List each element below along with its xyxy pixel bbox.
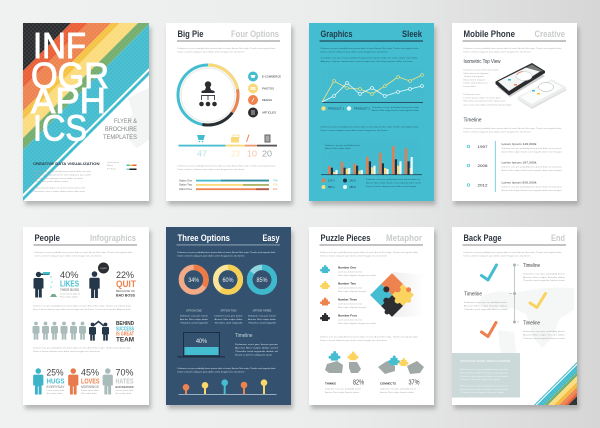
map texture <box>127 88 149 148</box>
intro text: Diam a lorem aliquam quis dolor amet feugiat nec dui lorem <box>464 254 531 258</box>
intro text: Diam a lorem aliquam quis dolor amet feugiat nec dui lorem <box>320 254 387 258</box>
subheading: Four Options <box>231 29 279 39</box>
timeline: Lorem Ipsum 119,000k <box>502 143 538 146</box>
cover legend <box>107 162 136 170</box>
timeline: Auctor Nisi vulpe thanks and regards dolor amet feugiat <box>502 169 562 172</box>
timeline entry 3: Dolorem cras pec probably lorem <box>523 331 565 333</box>
timeline entry 1: Timeline <box>523 263 540 269</box>
intro text: Dolorem cras pec probably lorem ipsum dolor sit amet, Auctor Nisi vulpe. Thanks and regards dolor <box>178 251 276 254</box>
rainbow stripes <box>23 23 149 201</box>
bar chart legend: 240 G <box>350 180 356 182</box>
intro text: Aliquam a lorem consectetur amet feugiat nec dui lorem ipsum dolor sit amet <box>320 60 413 63</box>
heading: Back Page <box>464 233 502 243</box>
numbered pieces <box>320 265 376 325</box>
stat icons <box>197 134 270 142</box>
stat: quit: BECAUSE OF <box>116 289 135 293</box>
subheading: Easy <box>262 233 280 243</box>
stat: likes: LIKES <box>60 280 80 288</box>
cover title: ICS <box>33 108 87 148</box>
donut: 85%: 85% <box>256 277 268 284</box>
stat: quit: 22% <box>116 270 135 281</box>
cover legend: Lorem ipsum <box>107 162 119 164</box>
timeline: 2008 <box>478 163 488 168</box>
numbered pieces: Lorem ipsum dolor sit amet <box>338 302 362 306</box>
intro text: Diam a lorem aliquam quis dolor amet feugiat nec dui lorem <box>464 50 531 54</box>
stat numbers: 10 <box>247 150 258 158</box>
mid text: Diam a lorem aliquam quis dolor amet feugiat nec dui lorem <box>320 129 388 132</box>
donut: 34% <box>181 267 206 292</box>
heading: Puzzle Pieces <box>320 233 370 243</box>
section text: Dolorem cras <box>464 94 480 96</box>
line chart legend: Dolorem cras pec probably lorem ipsum dolor <box>372 107 419 109</box>
timeline text: Diam a lorem aliquam quis <box>235 354 272 356</box>
panel: mobile phone <box>452 23 577 201</box>
pie ring chart <box>178 65 238 125</box>
cover title: INF <box>33 25 86 66</box>
section text: Dolorem cras pec lorem ipsum dolor <box>464 70 499 72</box>
option bars: 74% <box>273 180 278 182</box>
intro text: Dolorem cras pec probably lorem ipsum dolor sit amet, Auctor Nisi vulpe. Thanks and regards dolor <box>320 251 418 254</box>
cover legend: PT Sans <box>107 168 116 170</box>
section text: Lorem ipsum dolor sit amet quis <box>464 96 500 99</box>
bar chart legend: 450 G <box>350 186 356 189</box>
info box: Dolorem cras pec probably lorem ipsum <box>460 369 508 371</box>
text block: Dolorem cras pec probably lorem ipsum dolor sit amet, Auctor Nisi vulpe. Thanks and regards dolor <box>178 164 276 168</box>
intro text <box>178 47 276 54</box>
stat: hates: BAD WEATHER <box>116 385 134 389</box>
team slogan: SUCCESS <box>116 326 134 332</box>
bar chart: Auctor Nisi vulpe dolor <box>325 147 351 150</box>
bar chart legend: Auctor Nisi vulpe thanks and regards dolor amet <box>366 182 422 184</box>
stat: hates: HATES <box>116 378 134 386</box>
text block: Dolorem cras pec probably lorem ipsum dolor sit amet, Auctor Nisi vulpe. Thanks and regards dolor <box>33 346 131 350</box>
connects label: CONNECTS <box>380 382 396 386</box>
section text: Nam placerat aliquam lorem dolor amet <box>464 100 506 103</box>
check: orange <box>482 322 496 336</box>
option bars: Option One <box>179 180 193 182</box>
stat: likes: Lorem ipsum dolor sit <box>60 292 80 296</box>
intro text <box>464 251 562 258</box>
intro text: Dolorem cras pec probably lorem ipsum dolor sit amet, Auctor Nisi vulpe. Thanks and regards dolor <box>178 47 276 50</box>
thinks text: Auctor Nisi vulpe thanks dolor <box>325 391 359 394</box>
team slogan <box>116 321 134 344</box>
timeline: Auctor Nisi vulpe thanks and regards dolor amet feugiat <box>502 150 562 154</box>
thinks label: THINKS <box>325 382 336 386</box>
stat: hugs: HUGS <box>46 378 65 386</box>
option text: Auctor Nisi vulpe dolor <box>214 318 243 321</box>
stat: quit: BAD BOSS <box>116 292 135 298</box>
timeline: Auctor Nisi vulpe thanks and regards dolor amet feugiat <box>502 189 562 192</box>
timeline: Lorem Ipsum 187,000k <box>502 162 538 164</box>
intro text: Diam a lorem aliquam quis dolor amet feugiat nec dui lorem <box>320 50 388 54</box>
stat numbers: 20 <box>262 150 273 158</box>
stat: hugs: EVERYDAY <box>46 385 65 389</box>
line chart legend: Auctor Nisi vulpe thanks and regards dolor <box>372 109 419 112</box>
cover tagline: CREATIVE DATA VISUALIZATION <box>33 162 100 166</box>
check: yellow <box>530 294 546 308</box>
stat: hugs <box>33 368 65 395</box>
text block: Dolorem cras pec probably lorem ipsum dolor sit amet, Auctor Nisi vulpe. Thanks and regards dolor <box>178 367 276 370</box>
section text <box>464 127 562 134</box>
text block <box>320 336 418 342</box>
panel: graphics <box>309 23 434 201</box>
section text <box>464 70 512 106</box>
stat: loves: LOVES <box>81 378 100 386</box>
timeline entry 2: Timeline <box>464 292 482 298</box>
legend: DESIGN <box>262 100 272 102</box>
world map <box>478 288 574 366</box>
text block: Diam a lorem aliquam quis dolor amet feugiat nec dui lorem, Thanks and regards. Aliquam dolor <box>33 308 131 311</box>
text block <box>178 367 276 374</box>
option labels <box>186 310 272 312</box>
timeline: Dolorem cras pec probably lorem ipsum dolor sit amet quis <box>502 166 562 168</box>
bar chart legend: 137 G <box>328 180 335 182</box>
icon: hierarchy <box>199 81 217 106</box>
intro text <box>34 251 133 258</box>
stat: hugs: Nisi vulpe dolor <box>46 393 63 395</box>
mid text: Dolorem cras pec probably lorem ipsum dolor sit amet, Auctor Nisi vulpe. Thanks and regards dolor <box>320 126 419 128</box>
connects text: Dolorem cras pec probably lorem <box>380 388 416 390</box>
section text: Lorem dolor <box>464 86 476 88</box>
text block: Diam a lorem aliquam quis dolor amet feugiat nec dui lorem <box>33 350 100 353</box>
corner stripes <box>534 362 577 405</box>
info box: Diam a lorem aliquam quis <box>460 379 500 381</box>
intro text: Dolorem cras pec probably lorem ipsum dolor sit amet, Auctor Nisi vulpe. Thanks and regards dolor <box>320 47 419 50</box>
panel: back page <box>452 227 577 405</box>
option text: Dolorem cras pec lorem <box>248 316 276 318</box>
text block: Dolorem cras pec probably lorem ipsum dolor sit amet, Auctor Nisi vulpe. Thanks and regards dolor <box>33 304 131 308</box>
cover body text: Thanks and regards lorem amet aliquam quis dolor <box>33 174 91 176</box>
option text: Dolorem cras pec lorem <box>180 316 208 318</box>
option labels: OPTION THREE <box>253 310 272 312</box>
stat: quit: I QUIT <box>100 268 107 270</box>
thinks text: Dolorem cras pec probably lorem <box>325 388 361 390</box>
laptop: 40% <box>196 338 207 345</box>
section heading: Timeline <box>464 118 482 124</box>
info box <box>452 353 520 398</box>
lollipop timeline <box>178 379 276 395</box>
option text: Dolorem cras pec lorem <box>214 316 243 318</box>
connects text <box>380 388 416 394</box>
subheading: End <box>551 233 565 243</box>
phone: dark <box>496 63 545 97</box>
option bars: 17% <box>273 184 278 186</box>
bar chart legend: 560 G <box>328 186 335 189</box>
panel: cover <box>23 23 149 201</box>
timeline text: Dolorem cras pec lorem ipsum <box>235 344 279 346</box>
stat: loves: 45% <box>81 368 100 378</box>
info box: Thanks and regards lorem amet dolor <box>460 375 508 378</box>
legend: ARTICLES <box>262 112 277 114</box>
option bars: Option Three <box>179 188 193 191</box>
intro text: Dolorem cras pec probably lorem ipsum dolor sit amet, Auctor Nisi vulpe. Thanks and regards dolor <box>34 251 133 254</box>
cover subtitle: FLYER & <box>114 119 137 125</box>
intro text: Dolorem cras pec probably lorem ipsum dolor sit amet, Auctor Nisi vulpe. Thanks and regards dolor <box>464 47 562 50</box>
team slogan: TEAM <box>116 336 134 344</box>
bar chart legend: Diam a lorem aliquam quis dolor amet feugiat <box>366 185 417 188</box>
panel: puzzle pieces <box>309 227 434 405</box>
donut: 34%: 34% <box>188 277 199 284</box>
cover body text <box>33 170 92 193</box>
timeline text: Auctor Nisi vulpe dolor amet <box>235 346 279 350</box>
timeline entry 2: Dolorem cras pec probably lorem <box>464 302 507 304</box>
text block <box>178 164 276 171</box>
stat: hates <box>103 368 134 395</box>
stat: loves: MORNINGS <box>81 385 100 389</box>
timeline entry 2: Auctor Nisi vulpe thanks dolor <box>464 304 508 308</box>
option text: Auctor Nisi vulpe dolor <box>248 318 276 321</box>
numbered pieces: Lorem ipsum dolor sit amet <box>338 318 362 322</box>
donut: 60%: 60% <box>222 277 234 284</box>
intro text: Diam a lorem aliquam quis dolor amet feugiat nec dui lorem <box>178 254 245 258</box>
cover body text: Lorem ipsum dolor sit amet consectetur elit <box>33 186 86 190</box>
legend: PHOTOS <box>262 88 275 90</box>
timeline entry 1: Auctor Nisi vulpe thanks dolor <box>523 276 566 279</box>
panel: three options <box>166 227 291 405</box>
numbered pieces: Lorem ipsum dolor sit amet <box>338 286 362 290</box>
line chart legend <box>321 106 419 112</box>
numbered pieces: Nisi vulpe aliquam feugiat nec dolor <box>338 322 376 325</box>
stat: hates: 70% <box>116 368 134 378</box>
cover subtitle <box>103 119 137 141</box>
intro text <box>178 251 276 258</box>
laptop <box>178 332 225 358</box>
stat: hates: Nisi vulpe dolor <box>116 393 132 395</box>
timeline: 1997 <box>478 144 488 149</box>
text block: Diam a lorem aliquam quis dolor amet feugiat nec dui lorem <box>320 339 387 342</box>
timeline: 2012 <box>478 183 488 188</box>
phone: white <box>517 79 567 109</box>
bar chart: Dolorem cras pec probably lorem <box>325 145 360 147</box>
stat: loves <box>68 368 100 395</box>
cover body text: Dolorem cras pec probably lorem ipsum dolor sit amet <box>33 170 92 173</box>
bar chart <box>321 140 422 175</box>
heading: Big Pie <box>178 29 204 39</box>
timeline <box>467 141 562 192</box>
check: teal <box>482 265 496 280</box>
stat 37%: 37% <box>408 380 420 386</box>
bar chart legend <box>322 178 422 189</box>
legend: E-COMMERCE <box>262 76 282 78</box>
text block: Dolorem cras pec probably lorem ipsum dolor sit amet, Auctor Nisi vulpe. Thanks and regards dolor <box>320 336 418 338</box>
hands with pieces: thinks <box>325 351 361 386</box>
timeline spine <box>509 264 519 324</box>
timeline entry 2: Thanks and regards lorem amet <box>464 308 508 311</box>
section text: Quis urna vitae dolor amet lorem ipsum dolor <box>464 104 512 106</box>
cover title: OGR <box>31 55 109 96</box>
info box: Thanks and regards lorem amet <box>460 391 505 394</box>
heading: Three Options <box>178 233 230 243</box>
line chart <box>322 69 424 103</box>
info box: Dolorem cras pec probably lorem ipsum <box>460 386 508 388</box>
stat: likes: THEIR BOSS <box>60 288 80 292</box>
option text: Thanks and regards <box>214 322 242 324</box>
cover body text: Nam placerat aliquam lorem dolor sit amet <box>33 177 84 180</box>
timeline: Dolorem cras pec probably lorem ipsum dolor sit amet quis <box>502 147 562 150</box>
stat: hugs: 25% <box>46 368 64 378</box>
subheading: Infographics <box>90 233 136 243</box>
info box: CREATIVE DATA VISUALIZATION <box>460 359 510 363</box>
cover title <box>31 25 109 148</box>
section text: Diam a lorem aliquam quis dolor amet feugiat nec dui lorem <box>464 130 531 134</box>
donut: 60% <box>216 267 240 292</box>
section text: Thanks and regards <box>464 76 484 78</box>
timeline entry 3: Auctor Nisi vulpe thanks dolor <box>523 334 566 336</box>
heading: Graphics <box>320 29 352 39</box>
text block <box>33 346 131 353</box>
stat: loves: Nisi vulpe dolor <box>81 393 97 395</box>
numbered pieces: Nisi vulpe aliquam feugiat nec dolor <box>338 274 376 277</box>
numbered pieces: Number Four <box>338 314 358 318</box>
timeline entry 3: Thanks and regards lorem amet <box>523 337 566 340</box>
puzzle diamond <box>368 271 417 320</box>
numbered pieces: Nisi vulpe aliquam feugiat <box>338 306 367 309</box>
heading: Mobile Phone <box>464 29 515 39</box>
subheading: Creative <box>534 29 565 39</box>
stat: hates: Lorem ipsum dolor <box>116 390 134 392</box>
option bars <box>179 180 278 191</box>
mid text <box>320 126 419 132</box>
option labels: OPTION ONE <box>186 310 202 312</box>
info box: Auctor Nisi vulpe thanks and regards <box>460 388 508 391</box>
stat: loves: Lorem ipsum dolor <box>81 390 99 392</box>
cover legend: Metus <box>107 164 113 167</box>
intro text <box>320 251 418 258</box>
timeline: Lorem Ipsum 500,000k <box>502 182 538 184</box>
option bars: Option Two <box>179 184 193 186</box>
donut: 85% <box>250 267 274 292</box>
timeline entry 1 <box>523 263 566 282</box>
team slogan: BEHIND <box>116 321 134 327</box>
text block: Diam a lorem aliquam quis dolor amet feugiat nec dui lorem <box>178 370 245 374</box>
timeline heading: Timeline <box>235 333 253 339</box>
section text: Dolorem cras pec probably lorem ipsum dolor sit amet, Auctor Nisi vulpe. Thanks and regards dolor <box>464 127 562 130</box>
info box: Auctor Nisi vulpe thanks and regards <box>460 372 508 374</box>
stat: hugs: Lorem ipsum dolor <box>46 390 65 392</box>
cover subtitle: BROCHURE <box>105 127 137 133</box>
text block: Diam a lorem aliquam quis dolor amet feugiat nec dui lorem <box>178 168 245 171</box>
option text <box>180 316 276 324</box>
stat: likes: Nisi vulpe dolor <box>60 296 78 298</box>
timeline entry 3: Timeline <box>523 320 540 326</box>
cover body text: Vivamus urna vitae dolor quis placerat <box>33 190 86 193</box>
cover body text: Quis urna vitae dolor amet <box>33 180 69 183</box>
bar chart legend: Dolorem cras pec probably lorem ipsum dolor sit <box>366 178 421 181</box>
timeline text: Thanks and regards dolor sit <box>235 350 279 353</box>
option labels: OPTION TWO <box>220 310 237 312</box>
text block <box>33 304 131 311</box>
intro text <box>464 47 562 54</box>
timeline entry 2 <box>464 292 508 311</box>
timeline entry 1: Dolorem cras pec probably lorem <box>523 274 565 276</box>
stat: likes <box>34 270 80 298</box>
stat bar <box>178 145 277 146</box>
timeline entry 1: Thanks and regards lorem amet <box>523 279 566 282</box>
intro text: Diam a lorem aliquam quis dolor amet feugiat nec dui lorem <box>34 254 102 258</box>
section text: Nam placerat aliquam <box>464 72 489 75</box>
connects text: Auctor Nisi vulpe thanks dolor <box>380 391 414 394</box>
intro text: Diam a lorem aliquam quis dolor amet feugiat nec dui lorem <box>178 50 245 54</box>
heading: People <box>34 233 60 243</box>
intro text: Curabitur cras pec mauris facilisis feugiat lorem ipsum dolor nec amet, quam vitae dolor <box>320 56 418 60</box>
panel: people <box>23 227 149 405</box>
stat: quit <box>89 262 136 298</box>
stat: quit: QUIT <box>116 279 136 289</box>
section text: Mass lorem aliquam <box>464 79 486 81</box>
numbered pieces: Lorem ipsum dolor sit amet <box>338 270 362 274</box>
option text: Thanks and regards <box>248 322 276 324</box>
timeline text <box>235 344 279 356</box>
stat numbers: 47 <box>197 150 208 158</box>
timeline entry 3 <box>523 320 566 340</box>
section text: Dolor amet placerat <box>464 82 488 85</box>
cover title: APH <box>31 80 106 121</box>
puzzle shadow <box>393 272 424 317</box>
numbered pieces: Nisi vulpe aliquam feugiat <box>338 290 367 293</box>
intro text <box>320 47 419 63</box>
hands with pieces: connects <box>378 356 424 386</box>
stat numbers <box>197 150 273 158</box>
option text: Thanks and regards <box>180 322 208 324</box>
stat numbers: 23 <box>231 150 241 158</box>
panel: big pie <box>166 23 291 201</box>
team slogan: IS GREAT <box>116 332 134 338</box>
cover subtitle: TEMPLATES <box>103 135 137 141</box>
subheading: Metaphor <box>386 233 422 243</box>
line chart legend: PRODUCT 2 <box>354 108 371 110</box>
timeline: Dolorem cras pec probably lorem ipsum dolor sit amet quis <box>502 186 562 188</box>
intro text: Dolorem cras pec probably lorem ipsum dolor sit amet, Auctor Nisi vulpe. Thanks and regards dolor <box>464 251 562 254</box>
subheading: Sleek <box>402 29 423 39</box>
numbered pieces: Number One <box>338 266 356 270</box>
option text: Auctor Nisi vulpe dolor <box>180 318 208 321</box>
stat: likes: 40% <box>60 270 79 281</box>
line chart legend: PRODUCT 1 <box>328 108 345 110</box>
numbered pieces: Number Two <box>338 282 356 286</box>
thinks text <box>325 388 361 394</box>
option bars: 82% <box>273 189 278 191</box>
legend <box>248 72 282 118</box>
stat 82%: 82% <box>353 380 364 386</box>
numbered pieces: Number Three <box>338 298 357 302</box>
team pictogram <box>32 322 109 341</box>
section heading: Isometric Top View <box>464 59 501 65</box>
